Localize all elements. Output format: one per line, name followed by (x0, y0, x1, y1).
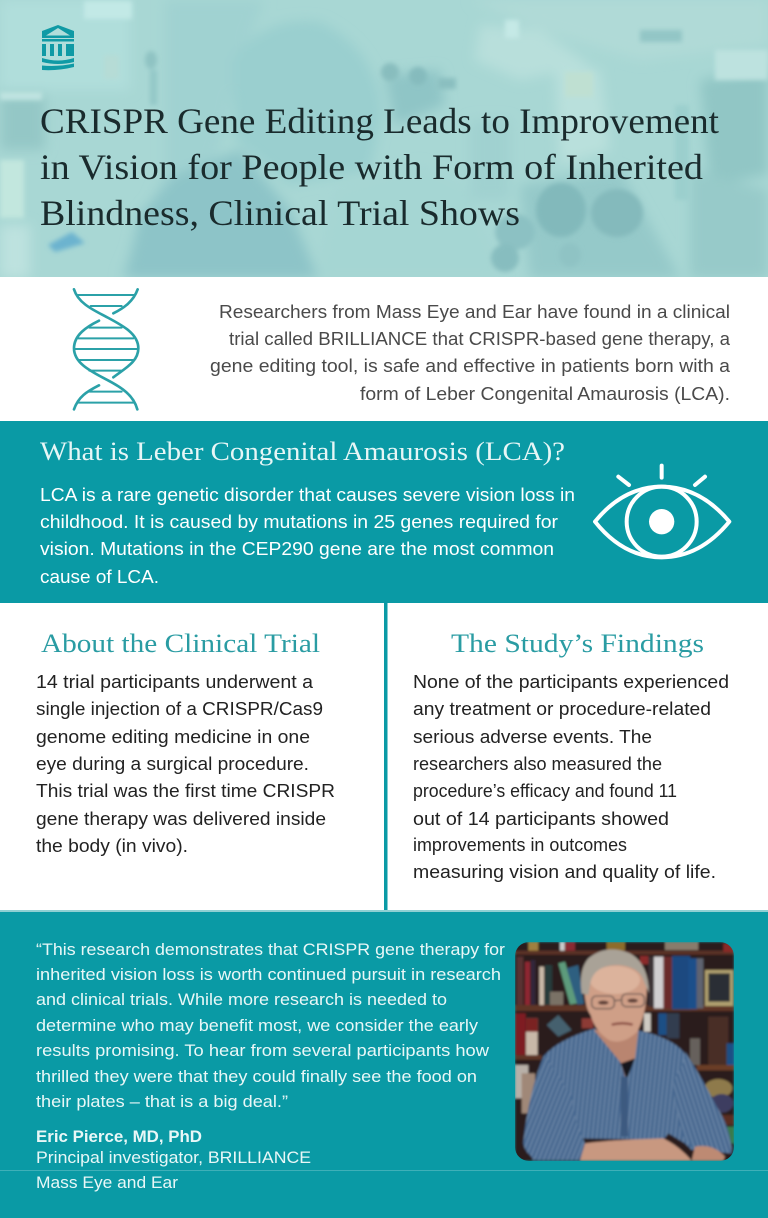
panel: about the clinical trial (0, 603, 384, 910)
intro text: form of Leber Congenital Amaurosis (LCA). (360, 383, 730, 404)
clinical trial text: the body (in vivo). (36, 835, 188, 856)
hero panel with operating room photo (0, 0, 768, 278)
intro text (210, 301, 731, 404)
findings text: procedure’s efficacy and found 11 (413, 780, 677, 801)
findings text: measuring vision and quality of life. (413, 861, 716, 882)
findings text: serious adverse events. The (413, 726, 652, 747)
quote text: thrilled they were that they could finally see the food on (36, 1067, 477, 1086)
title: CRISPR Gene Editing Leads to Improvement (40, 101, 719, 141)
panel: the study's findings (388, 603, 768, 910)
attribution: Principal investigator, BRILLIANCE (36, 1148, 311, 1167)
attribution: Mass Eye and Ear (36, 1173, 178, 1192)
clinical trial text: This trial was the first time CRISPR (36, 780, 335, 801)
quote text: and clinical trials. While more research is needed to (36, 990, 447, 1009)
quote text: determine who may benefit most, we consider the early (36, 1016, 479, 1035)
intro text: gene editing tool, is safe and effective in patients born with a (210, 355, 731, 376)
clinical trial text: eye during a surgical procedure. (36, 753, 309, 774)
icon: DNA helix (74, 289, 138, 409)
findings text: None of the participants experienced (413, 671, 729, 692)
clinical trial text (36, 671, 335, 856)
icon: eye (595, 466, 729, 557)
heading: the study's findings: The Study’s Findings (451, 629, 704, 658)
clinical trial text: gene therapy was delivered inside (36, 808, 326, 829)
findings text: any treatment or procedure-related (413, 698, 711, 719)
clinical trial text: 14 trial participants underwent a (36, 671, 314, 692)
findings text: researchers also measured the (413, 753, 662, 774)
intro text: trial called BRILLIANCE that CRISPR-based gene therapy, a (229, 328, 731, 349)
findings text (413, 671, 729, 882)
title: in Vision for People with Form of Inherited (40, 147, 703, 187)
intro text: Researchers from Mass Eye and Ear have found in a clinical (219, 301, 730, 322)
portrait photo (515, 942, 734, 1161)
quote text: inherited vision loss is worth continued pursuit in research (36, 965, 501, 984)
quote text: results promising. To hear from several participants how (36, 1041, 490, 1060)
heading: what is LCA: What is Leber Congenital Amaurosis (LCA)? (40, 437, 565, 466)
findings text: out of 14 participants showed (413, 808, 669, 829)
LCA description: LCA is a rare genetic disorder that causes severe vision loss in (40, 484, 575, 505)
title: Blindness, Clinical Trial Shows (40, 193, 520, 233)
panel: introduction (0, 278, 768, 421)
attribution: Eric Pierce, MD, PhD (36, 1127, 202, 1146)
LCA description (40, 484, 575, 587)
quote text (36, 940, 505, 1111)
panel: what is LCA (0, 421, 768, 603)
icon: Mass Eye and Ear logo (42, 25, 74, 70)
title (40, 101, 719, 233)
panel: quote (0, 910, 768, 1218)
LCA description: vision. Mutations in the CEP290 gene are the most common (40, 538, 554, 559)
clinical trial text: single injection of a CRISPR/Cas9 (36, 698, 323, 719)
findings text: improvements in outcomes (413, 834, 627, 855)
heading: about the clinical trial: About the Clinical Trial (41, 629, 320, 658)
quote text: their plates – that is a big deal.” (36, 1092, 288, 1111)
quote text: “This research demonstrates that CRISPR gene therapy for (36, 940, 505, 959)
LCA description: cause of LCA. (40, 566, 159, 587)
attribution (36, 1127, 311, 1192)
LCA description: childhood. It is caused by mutations in 25 genes required for (40, 511, 558, 532)
clinical trial text: genome editing medicine in one (36, 726, 310, 747)
